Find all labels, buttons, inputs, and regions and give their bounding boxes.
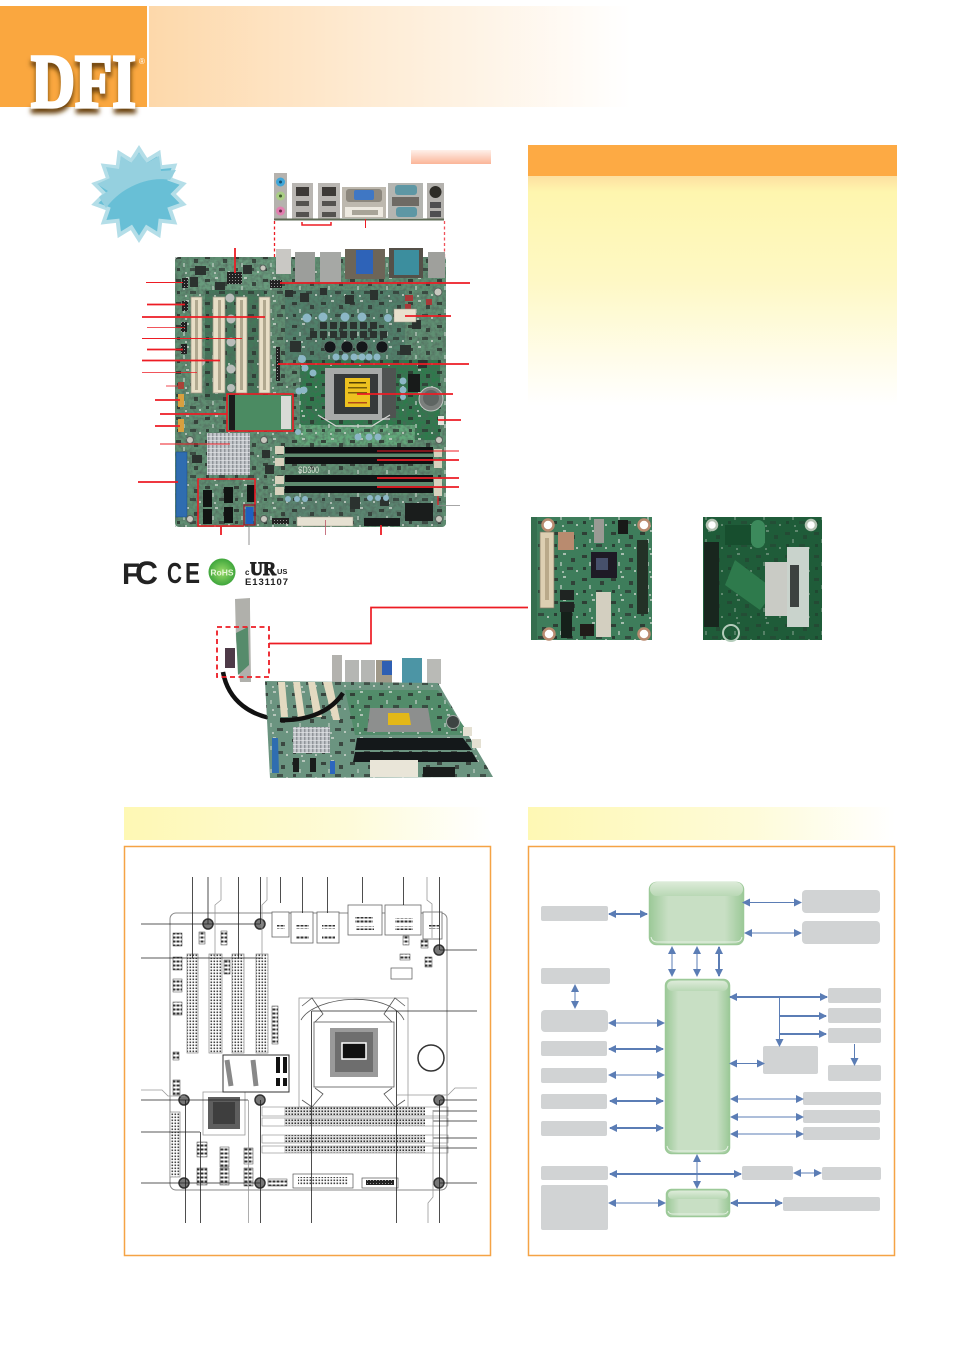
riser bracket with module and cable <box>223 598 343 720</box>
thin connection arrows <box>575 902 821 1203</box>
SATA connectors <box>293 758 335 774</box>
IDE connector <box>272 738 279 773</box>
rear I/O back <box>332 655 441 686</box>
riser board <box>236 627 249 675</box>
audio jacks <box>274 173 287 220</box>
inductors <box>324 341 388 353</box>
ribbon connector <box>225 648 235 668</box>
rear connector strip on board <box>276 248 445 282</box>
module back photo <box>703 517 822 641</box>
mini-PCIe zone <box>228 395 293 431</box>
rear I/O pin details <box>277 917 439 939</box>
starburst badge <box>91 145 187 243</box>
ATX main power connector <box>297 517 353 526</box>
DIMM sockets <box>275 446 442 496</box>
PCB <box>175 257 446 527</box>
PCB component specks <box>175 257 446 527</box>
panel: board layout <box>124 846 490 1256</box>
certification logos <box>122 555 288 591</box>
DFI logo: DFI <box>31 45 137 129</box>
COM ports <box>388 183 423 218</box>
small components <box>190 265 433 521</box>
ATX power <box>370 760 418 777</box>
PCB surface noise <box>175 257 446 527</box>
chipset box <box>666 980 730 1154</box>
IDE outline <box>170 1112 180 1177</box>
IDE connector <box>176 452 187 517</box>
DIMM slots <box>284 1107 425 1153</box>
header gradient band <box>149 6 631 107</box>
red chokes <box>405 295 432 310</box>
black cable <box>223 672 343 720</box>
metal bracket <box>235 598 251 682</box>
motherboard 3D photo <box>265 655 493 778</box>
right column specifications panel <box>528 145 897 406</box>
electrolytic caps <box>197 294 236 392</box>
CPU socket <box>367 708 432 732</box>
leader lines <box>141 877 477 1223</box>
CPU socket <box>318 368 396 426</box>
board layout heading <box>124 807 491 840</box>
specifications header bar <box>528 145 897 176</box>
yellow pin headers <box>178 394 184 432</box>
small headers <box>173 931 432 1186</box>
FCC mark: C <box>135 555 158 591</box>
UL mark: c <box>245 568 250 577</box>
specifications body <box>528 176 897 406</box>
rear I/O panel photo <box>274 173 444 220</box>
DIMM sockets <box>353 738 478 762</box>
super I/O box <box>666 1190 730 1216</box>
CE mark: E <box>185 558 200 590</box>
PS/2 and USB ports <box>427 183 444 220</box>
rear I/O outlines <box>272 905 442 943</box>
CE mark <box>167 558 200 590</box>
DIMM sockets: SD300 <box>298 465 319 475</box>
PCI slots <box>191 297 270 393</box>
chipset <box>203 1092 245 1135</box>
grey peripheral boxes <box>541 890 881 1230</box>
DFI logo: DFI <box>31 40 136 124</box>
board outline <box>170 913 447 1190</box>
panel: block diagram <box>528 846 894 1256</box>
LAN and USB ports <box>292 183 340 220</box>
RoHS mark: RoHS <box>210 568 234 578</box>
ATX 8-pin connector <box>394 309 416 322</box>
DFI logo: ® <box>139 57 145 66</box>
red callout to riser photo <box>217 608 528 677</box>
red callouts below I/O panel <box>274 219 444 265</box>
riser module photos <box>531 517 822 641</box>
bottom black connector <box>364 518 400 526</box>
pink label tag <box>411 150 491 164</box>
SATA connectors <box>203 485 255 524</box>
mounting holes <box>179 919 444 1188</box>
black connector <box>423 767 455 777</box>
FCC mark <box>122 555 158 591</box>
FCC mark: F <box>122 558 140 591</box>
CPU socket <box>299 998 408 1107</box>
RoHS mark <box>208 558 236 586</box>
module front photo <box>531 517 652 640</box>
heatsink <box>293 727 330 753</box>
block diagram heading <box>528 807 895 840</box>
battery <box>418 1045 444 1071</box>
mini-PCIe outline <box>223 1055 289 1092</box>
mounting holes <box>186 265 442 522</box>
PCB <box>265 681 493 778</box>
PCI slots <box>278 682 340 720</box>
capacitors <box>285 312 406 502</box>
battery <box>419 387 443 411</box>
branch arrows <box>780 997 854 1065</box>
battery <box>446 716 460 728</box>
processor box <box>650 882 744 944</box>
UL mark: UR <box>250 559 276 580</box>
cable over board <box>280 693 343 720</box>
white socket on right edge <box>438 416 444 425</box>
orange logo block <box>0 6 147 107</box>
VGA and DVI ports <box>342 187 386 218</box>
UL mark: US <box>277 567 287 576</box>
PCI slots <box>187 954 268 1053</box>
UL mark: E131107 <box>245 577 288 588</box>
header banner <box>0 6 631 129</box>
heatsink <box>207 433 250 475</box>
UL mark <box>245 559 288 588</box>
red callout lines on board <box>138 248 470 545</box>
PCB zones <box>190 260 440 525</box>
CE mark: C <box>167 558 182 590</box>
thick connection arrows <box>609 914 827 1203</box>
left side headers <box>181 272 282 381</box>
motherboard top-view photo <box>175 248 446 527</box>
